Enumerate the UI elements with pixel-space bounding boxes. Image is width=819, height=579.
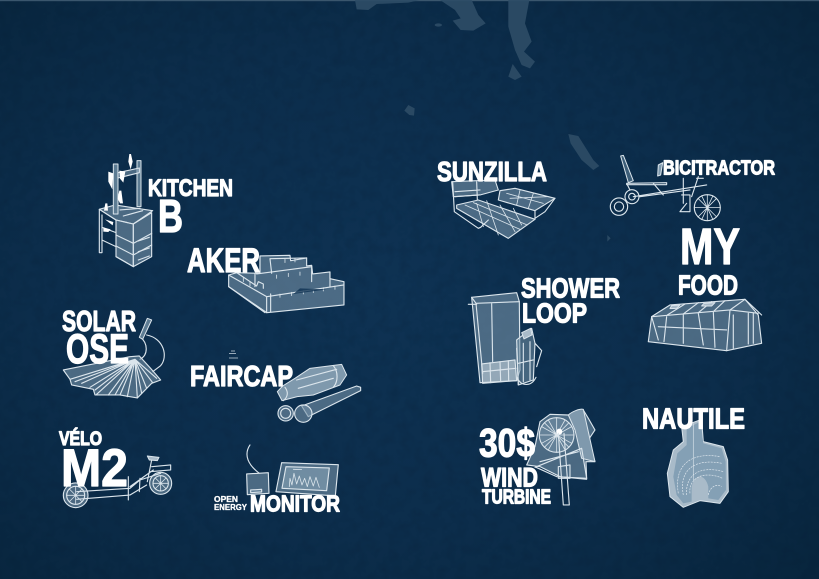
label: TURBINE: TURBINE bbox=[482, 486, 551, 508]
label: OSE: OSE bbox=[66, 325, 129, 372]
label: SOLAR: SOLAR bbox=[62, 306, 136, 338]
icon: bottle filter bbox=[277, 364, 361, 422]
icon: energy monitor and tablet bbox=[247, 445, 338, 496]
label: VÉLO: VÉLO bbox=[59, 428, 102, 450]
label: ENERGY: ENERGY bbox=[214, 502, 247, 512]
label: KITCHEN: KITCHEN bbox=[148, 175, 233, 202]
label: MONITOR: MONITOR bbox=[250, 490, 340, 516]
label: M2: M2 bbox=[61, 439, 128, 498]
icon: shower cabin and pump bbox=[468, 293, 542, 385]
label: SHOWER: SHOWER bbox=[521, 272, 620, 304]
icon: pedal tractor bbox=[610, 155, 720, 221]
label: NAUTILE: NAUTILE bbox=[642, 404, 745, 436]
icon: shell oven bbox=[667, 419, 728, 507]
label: OPEN: OPEN bbox=[214, 494, 238, 504]
project: Kitchen B bbox=[99, 154, 233, 267]
project: Vélo M2 bbox=[59, 428, 172, 508]
project: Faircap bbox=[190, 351, 361, 422]
map islands bbox=[355, 0, 611, 242]
project: Solar OSE bbox=[62, 306, 164, 398]
project: Aker bbox=[187, 242, 344, 313]
label: FOOD: FOOD bbox=[678, 270, 738, 300]
project: Sunzilla bbox=[437, 156, 555, 238]
icon: solar panels bbox=[452, 180, 555, 238]
label: B: B bbox=[158, 190, 183, 242]
label: BICITRACTOR: BICITRACTOR bbox=[663, 158, 775, 180]
small mark bbox=[229, 351, 238, 358]
project: Shower Loop bbox=[468, 272, 620, 385]
label: MY: MY bbox=[680, 218, 740, 275]
label: WIND: WIND bbox=[481, 462, 538, 492]
project: 30$ Wind Turbine bbox=[479, 409, 595, 508]
icon: solar concentrator bbox=[63, 318, 164, 398]
label: LOOP: LOOP bbox=[522, 298, 587, 328]
project: Open Energy Monitor bbox=[214, 445, 340, 516]
label: SUNZILLA: SUNZILLA bbox=[437, 156, 547, 187]
icon: wind turbine bbox=[527, 409, 595, 505]
project: Nautile bbox=[642, 404, 745, 507]
project: Bicitractor bbox=[610, 155, 775, 221]
label: FAIRCAP: FAIRCAP bbox=[190, 361, 293, 393]
label: 30$: 30$ bbox=[479, 422, 535, 466]
icon: kitchen unit bbox=[99, 154, 153, 267]
icon: greenhouse bbox=[648, 299, 762, 351]
project: My Food bbox=[648, 218, 762, 351]
label: AKER: AKER bbox=[187, 242, 260, 280]
icon: raised garden bed bbox=[229, 255, 344, 313]
icon: cargo bike bbox=[63, 456, 172, 508]
